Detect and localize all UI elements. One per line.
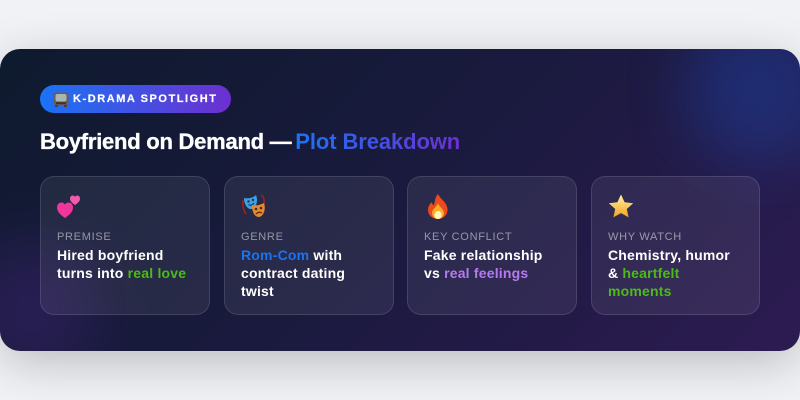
text: premise bbox=[57, 247, 186, 281]
top-right blue glow bbox=[685, 14, 800, 164]
label: key conflict: KEY CONFLICT bbox=[424, 231, 512, 243]
card: premise bbox=[40, 176, 210, 315]
label: genre: GENRE bbox=[241, 231, 284, 243]
bottom-left purple glow bbox=[0, 239, 100, 379]
text: genre bbox=[241, 247, 345, 299]
text: why watch: Chemistry, humor bbox=[608, 247, 730, 263]
card: genre bbox=[224, 176, 394, 315]
icon: fire bbox=[428, 194, 448, 219]
badge: K-Drama Spotlight: K-DRAMA SPOTLIGHT bbox=[73, 93, 218, 105]
text: key conflict: Fake relationship bbox=[424, 247, 543, 263]
text: why watch bbox=[608, 247, 730, 299]
text: why watch: moments bbox=[608, 283, 672, 299]
text: genre: Rom-Com with bbox=[241, 247, 342, 263]
text: genre: twist bbox=[241, 283, 274, 299]
card: key conflict bbox=[407, 176, 577, 315]
icon: star bbox=[608, 194, 634, 218]
banner panel bbox=[0, 49, 800, 351]
icon: theater masks bbox=[242, 194, 265, 217]
text: key conflict bbox=[424, 247, 543, 281]
text: why watch: & heartfelt bbox=[608, 265, 679, 281]
label: why watch: WHY WATCH bbox=[608, 231, 682, 243]
text: genre: contract dating bbox=[241, 265, 345, 281]
text: key conflict: vs real feelings bbox=[424, 265, 528, 281]
text: premise: turns into real love bbox=[57, 265, 186, 281]
icon: television bbox=[54, 92, 68, 107]
icon: two hearts bbox=[57, 196, 80, 218]
card: why watch bbox=[591, 176, 760, 315]
badge: K-Drama Spotlight bbox=[40, 85, 231, 113]
title: Boyfriend on Demand — Plot Breakdown bbox=[40, 129, 460, 154]
label: premise: PREMISE bbox=[57, 231, 111, 243]
text: premise: Hired boyfriend bbox=[57, 247, 163, 263]
